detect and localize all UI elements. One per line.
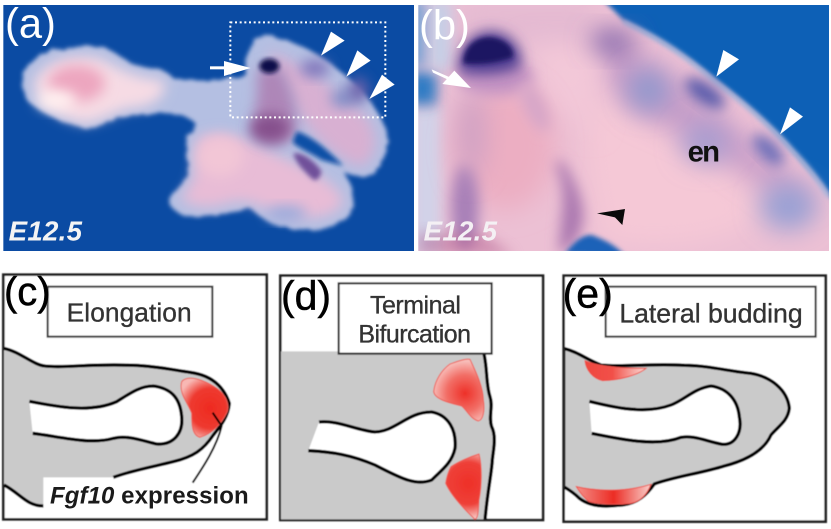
lower lateral Fgf10 domain (576, 484, 651, 504)
label: (b): (b) (419, 1, 470, 48)
label: (d): (d) (281, 272, 331, 318)
label: (e): (e) (563, 270, 613, 316)
upper Fgf10 domain (434, 359, 484, 421)
Terminal Bifurcation label box (339, 283, 492, 354)
dark Fgf10 spot (458, 32, 521, 74)
pointer line (193, 413, 222, 483)
tissue: pink-lilac explant (22, 35, 388, 230)
panel a: whole-mount photograph E12.5 (3, 0, 414, 251)
label: Fgf10 expression: Fgf10 expression (50, 482, 249, 509)
arrow: white arrow to dark tip (432, 69, 471, 88)
panel e: lateral budding diagram: Lateral budding (619, 299, 803, 329)
Fgf10 expression domain (181, 378, 228, 437)
dashed inset box (230, 22, 385, 117)
label: E12.5: E12.5 (9, 216, 83, 247)
stained patches (590, 31, 637, 52)
arrow: white arrow to dark tip (210, 61, 251, 76)
dark background blue (603, 0, 831, 203)
upper lateral Fgf10 domain (585, 361, 646, 381)
outer bud tube: soft walls only (476, 94, 556, 210)
panel d: terminal bifurcation diagram (280, 272, 543, 520)
broad colour washes (602, 122, 734, 230)
lumen (29, 386, 182, 444)
panel b: close-up photograph E12.5 (408, 0, 831, 257)
label: en: en (688, 136, 720, 169)
background blue and tissue (408, 0, 831, 257)
panel d: terminal bifurcation diagram: Terminal (370, 291, 461, 319)
tissue outline (4, 348, 229, 506)
label: E12.5: E12.5 (424, 216, 498, 247)
Elongation label box (48, 287, 212, 337)
label: (a): (a) (5, 0, 56, 46)
arrowheads: three white (321, 32, 395, 99)
panel c: elongation diagram (3, 270, 267, 519)
lower Fgf10 domain (446, 454, 481, 519)
panel c: elongation diagram: Elongation (67, 298, 192, 328)
panel d: terminal bifurcation diagram: Bifurcation (358, 321, 471, 349)
arrowheads: two white (716, 50, 803, 134)
gap between lobes (293, 132, 343, 166)
panel e: lateral budding diagram (563, 270, 826, 522)
lumen (308, 412, 455, 482)
label: (c): (c) (4, 270, 51, 314)
tissue outline (564, 348, 789, 506)
arrowhead: black (597, 209, 625, 225)
tissue (281, 351, 494, 520)
Lateral budding label box (606, 287, 816, 337)
lumen (589, 386, 740, 444)
